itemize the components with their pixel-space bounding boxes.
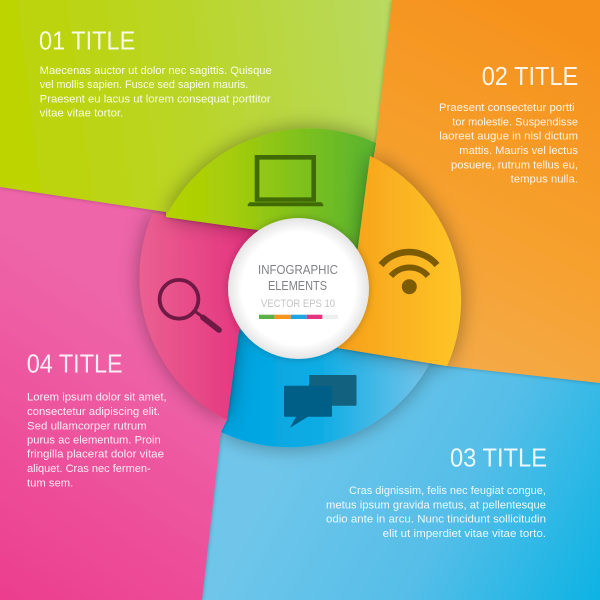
heading: 01 title: 01 TITLE [39, 25, 135, 55]
green background panel [0, 0, 396, 250]
text block: 04 description [27, 392, 167, 489]
panel: 02 orange [338, 0, 600, 383]
text block: 02 description: tempus nulla. [511, 174, 578, 186]
text block: 02 description: laoreet augue in nisl dictum [439, 130, 578, 142]
icon: chat bubbles [284, 375, 356, 428]
heading: 02 title: 02 TITLE [482, 61, 578, 91]
text block: 04 description: Lorem ipsum dolor sit amet, [27, 392, 167, 404]
text block: 03 description: elit ut imperdiet vitae vitae torto. [383, 528, 546, 540]
text block: 02 description [439, 102, 578, 186]
text block: 04 description: aliquet. Cras nec fermen- [27, 463, 151, 475]
text block: 01 description: Maecenas auctor ut dolor nec sagittis. Quisque [40, 65, 272, 77]
text block: 04 description: consectetur adipiscing elit. [27, 406, 160, 418]
text block: 04 description: purus ac elementum. Proin [27, 434, 161, 446]
text block: 03 description: Cras dignissim, felis nec feugiat congue, [349, 485, 546, 497]
center heading: ELEMENTS [268, 279, 327, 293]
text block: 01 description: vel mollis sapien. Fusce sed sapien mauris. [40, 79, 248, 91]
text block: 01 description [40, 65, 272, 120]
icon: wifi signal [381, 252, 437, 294]
text block: 03 description [326, 485, 546, 540]
center subheading: VECTOR EPS 10 [261, 298, 335, 310]
text block: 04 description: Sed ullamcorper rutrum [27, 420, 147, 432]
text block: 03 description: odio ante in arcu. Nunc tincidunt sollicitudin [326, 514, 546, 526]
pink background panel [0, 180, 258, 600]
white circle [228, 218, 369, 359]
text block: 01 description: Praesent eu lacus ut lorem consequat porttitor [40, 94, 271, 106]
orange background panel [338, 0, 600, 383]
panel: 03 blue [195, 325, 600, 600]
panel: 04 pink [0, 180, 258, 600]
blue background panel [195, 325, 600, 600]
text block: 01 description: vitae vitae tortor. [40, 108, 123, 120]
center heading: INFOGRAPHIC [258, 263, 338, 277]
text block: 04 description: fringilla placerat dolor vitae [27, 449, 164, 461]
pink circle segment [139, 213, 258, 420]
colour bar [259, 315, 338, 319]
text block: 02 description: tor molestie. Suspendisse [452, 116, 578, 128]
text block: 02 description: Praesent consectetur portti [439, 102, 575, 114]
center heading [258, 263, 338, 293]
panel: 01 green [0, 0, 396, 250]
text block: 02 description: posuere, rutrum tellus eu, [451, 159, 578, 171]
center badge [228, 218, 369, 359]
text block: 02 description: mattis. Mauris vel lectus [459, 145, 578, 157]
heading: 04 title: 04 TITLE [27, 349, 123, 379]
heading: 03 title: 03 TITLE [450, 443, 547, 473]
text block: 04 description: tum sem. [27, 477, 73, 489]
text block: 03 description: metus ipsum gravida metus, at pellentesque [326, 499, 546, 511]
blue circle segment [221, 330, 431, 447]
icon: magnifying glass [160, 280, 219, 330]
icon: laptop [248, 155, 323, 206]
green circle segment [166, 128, 376, 250]
orange circle segment [338, 156, 461, 366]
